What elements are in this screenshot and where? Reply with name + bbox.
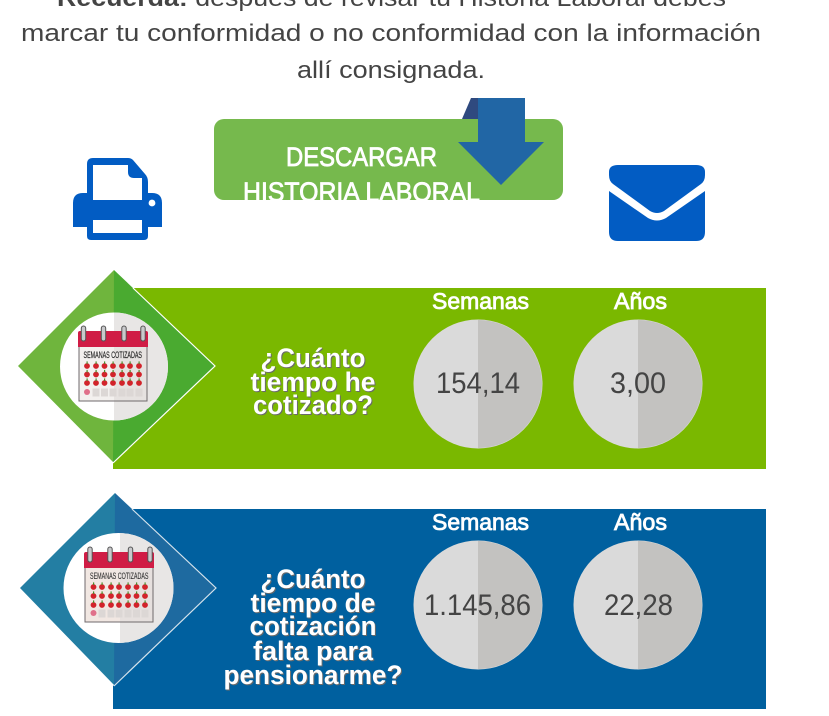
question heading: cotización	[250, 611, 376, 641]
intro text	[21, 0, 761, 84]
arrow back fold	[462, 98, 478, 119]
panel background	[113, 288, 766, 469]
question heading	[224, 564, 402, 690]
button background	[214, 119, 563, 200]
stat: años	[574, 288, 702, 448]
stat: semanas: 1.145,86	[424, 589, 531, 622]
icon: download arrow	[458, 98, 544, 185]
stat: semanas: Semanas	[432, 509, 529, 535]
intro line 3: allí consignada.	[297, 57, 485, 84]
button label	[244, 146, 480, 200]
icon: printer	[73, 158, 162, 240]
question heading: tiempo he	[250, 367, 376, 397]
calendar medallion: SEMANAS COTIZADAS	[84, 350, 142, 360]
stat: años: Años	[614, 288, 667, 314]
question heading: ¿Cuánto	[260, 343, 366, 373]
button label: HISTORIA LABORAL	[243, 177, 480, 207]
panel: tiempo faltante	[20, 493, 766, 709]
diamond badge	[18, 270, 215, 463]
download button	[214, 98, 563, 207]
icon: envelope	[609, 165, 705, 241]
question heading: tiempo de	[250, 588, 376, 618]
button label: DESCARGAR	[286, 142, 437, 172]
stat: años: Años	[614, 509, 667, 535]
calendar medallion: SEMANAS COTIZADAS	[90, 571, 148, 581]
question heading: ¿Cuánto	[260, 564, 366, 594]
stat: semanas	[414, 509, 542, 670]
intro line 2: marcar tu conformidad o no conformidad con la información	[21, 20, 761, 47]
stat: semanas	[414, 288, 542, 448]
calendar medallion	[64, 533, 176, 645]
question heading: cotizado?	[253, 390, 373, 420]
panel: tiempo cotizado	[18, 270, 766, 469]
question heading: pensionarme?	[224, 660, 402, 690]
panel background	[113, 509, 766, 709]
stat: años: 3,00	[610, 367, 666, 400]
stat: años: 22,28	[604, 589, 673, 622]
stat: semanas: Semanas	[432, 288, 529, 314]
stat: semanas: 154,14	[436, 367, 520, 400]
question heading	[250, 343, 376, 420]
diamond badge	[20, 493, 216, 686]
question heading: falta para	[253, 636, 374, 666]
stat: años	[574, 509, 702, 670]
calendar medallion	[60, 312, 170, 422]
